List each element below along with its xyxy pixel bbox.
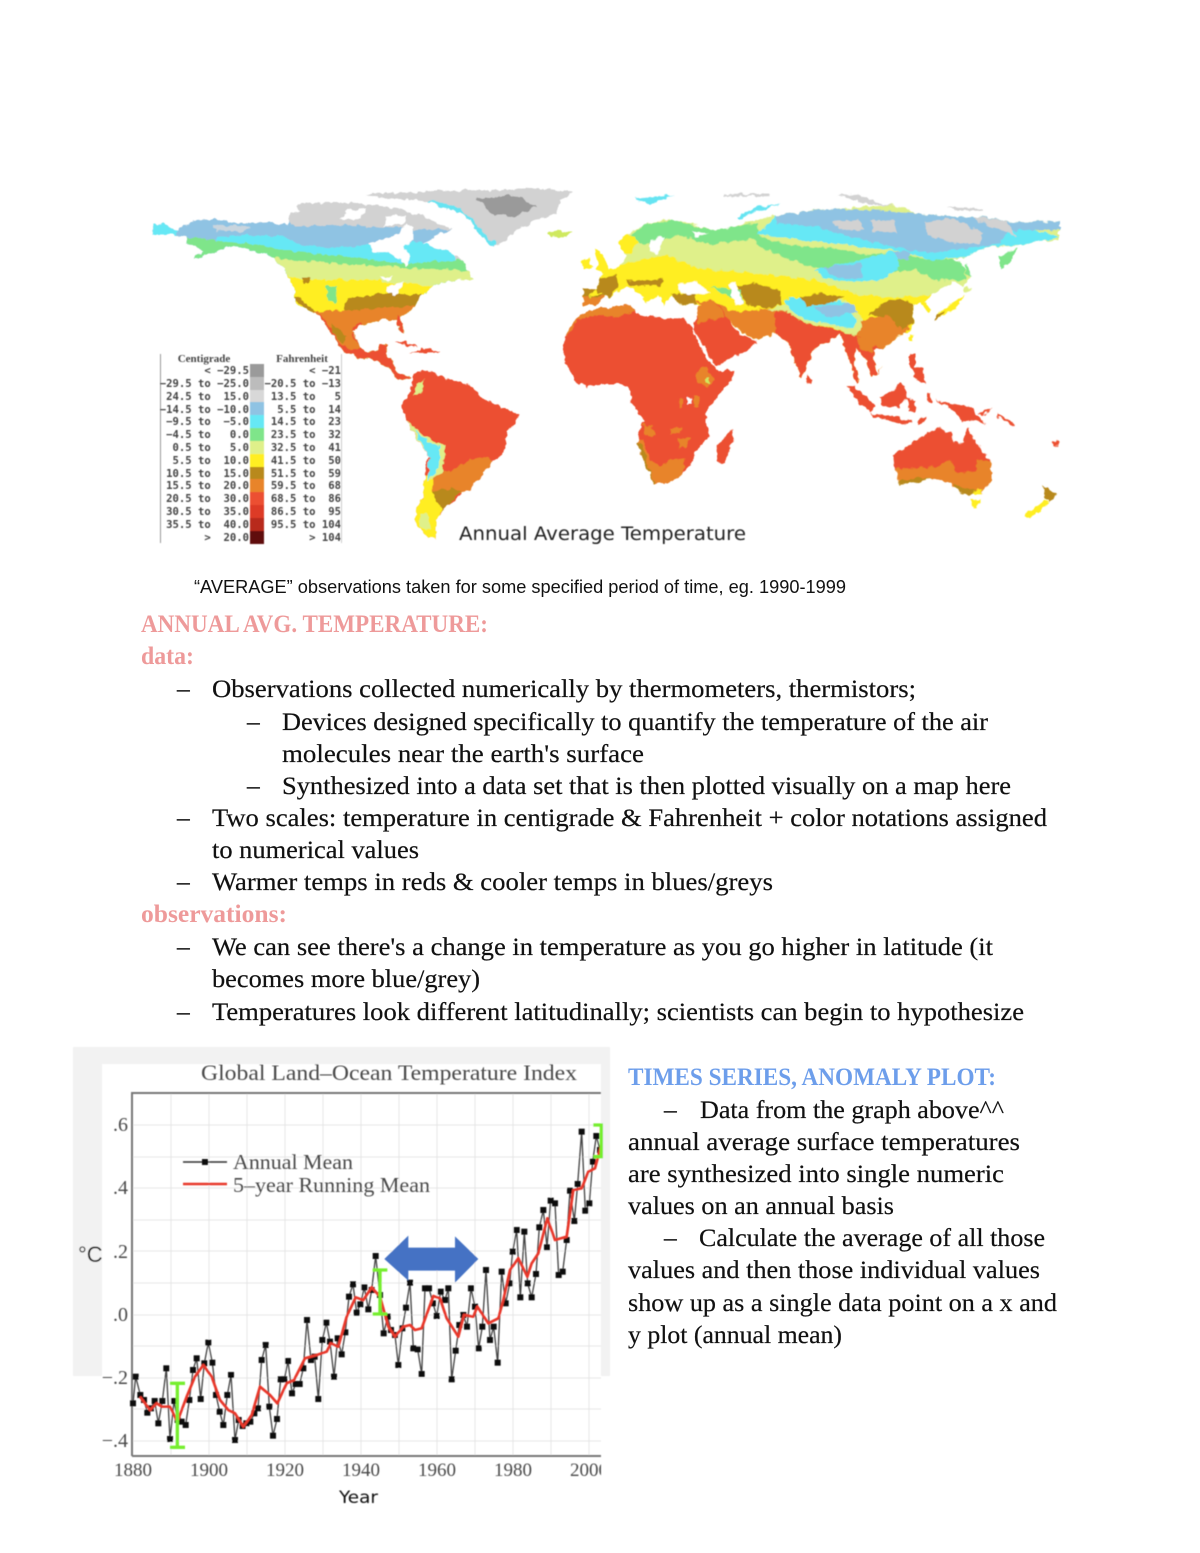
paragraph: calculate the average: y plot (annual mean) <box>628 1320 842 1349</box>
Caribbean islands <box>393 342 440 352</box>
legend centigrade labels: < −29.5 <box>204 365 249 377</box>
bullet list: data: – <box>176 803 190 832</box>
bullet list: data: – <box>246 771 260 800</box>
legend fahrenheit labels: 41.5 to 50 <box>271 455 341 467</box>
section: annual average temperature notes <box>141 609 1047 1026</box>
y axis labels: .6 <box>113 1114 128 1136</box>
legend centigrade labels: 15.5 to 20.0 <box>166 480 249 492</box>
legend centigrade labels: 24.5 to 15.0 <box>166 391 249 403</box>
bullet list: data: to numerical values <box>212 835 419 864</box>
Tasmania <box>971 499 981 508</box>
chart panel: Global Land-Ocean Temperature Index <box>73 1047 610 1508</box>
bullet list: observations: We can see there's a change in temperature as you go higher in latitude (it <box>212 932 993 961</box>
Hudson Bay and lakes <box>317 208 413 337</box>
x axis labels: 1920 <box>266 1460 304 1481</box>
panel background <box>73 1047 610 1376</box>
legend colour bar <box>250 364 264 544</box>
legend fahrenheit labels: 5.5 to 14 <box>277 404 341 416</box>
bullet list: observations <box>176 932 1024 1026</box>
bullet list: data: molecules near the earth's surface <box>282 739 644 768</box>
map caption: “AVERAGE” observations taken for some specified period of time, eg. 1990-1999 <box>194 576 846 597</box>
y axis labels <box>102 1114 128 1452</box>
legend fahrenheit labels: 51.5 to 59 <box>271 468 341 480</box>
paragraph: data from the graph: values on an annual basis <box>628 1191 894 1220</box>
legend fahrenheit labels <box>264 365 341 544</box>
x axis labels: 1900 <box>190 1460 228 1481</box>
y axis labels: −.4 <box>102 1430 128 1452</box>
map legend: temperature scale <box>160 353 342 544</box>
five-year running mean line <box>140 1143 602 1427</box>
Southeast Asian islands and New Guinea <box>847 353 1059 445</box>
legend fahrenheit labels: 68.5 to 86 <box>271 493 341 505</box>
subheading: data: data: <box>141 641 194 670</box>
blue double arrow <box>384 1236 478 1283</box>
legend fahrenheit labels: −20.5 to −13 <box>264 378 341 390</box>
Australia <box>892 426 994 496</box>
y axis labels: −.2 <box>102 1367 128 1389</box>
x axis labels <box>115 1462 602 1477</box>
Eurasia <box>588 202 1062 384</box>
annual mean line <box>133 1132 600 1440</box>
bullet list: data: Devices designed specifically to quantify the temperature of the air <box>282 707 989 736</box>
legend centigrade labels: −4.5 to 0.0 <box>166 429 249 441</box>
section: time series anomaly plot notes <box>628 1062 1057 1349</box>
legend fahrenheit labels: > 104 <box>309 532 341 544</box>
x axis labels: 1880 <box>114 1460 152 1481</box>
paragraph: data from the graph: – <box>663 1095 677 1124</box>
chart axes <box>132 1093 601 1456</box>
x axis labels: 1940 <box>342 1460 380 1481</box>
paragraph: calculate the average: values and then those individual values <box>628 1255 1040 1284</box>
subheading: observations: observations: <box>141 899 287 928</box>
bullet list: data: – <box>246 707 260 736</box>
paragraph: calculate the average: Calculate the average of all those <box>699 1223 1045 1252</box>
green range bracket: 1940s <box>373 1270 387 1314</box>
bullet list: data <box>176 674 1047 896</box>
legend centigrade labels: 20.5 to 30.0 <box>166 493 249 505</box>
Arctic islands <box>633 193 983 220</box>
Newfoundland <box>455 270 473 281</box>
y axis labels: .0 <box>113 1304 128 1326</box>
bullet list: data: – <box>176 867 190 896</box>
heading: annual avg temperature: ANNUAL AVG. TEMPERATURE: <box>141 609 488 638</box>
paragraph: calculate the average <box>628 1223 1057 1349</box>
South America <box>400 369 520 540</box>
bullet list: data: Warmer temps in reds & cooler temps in blues/greys <box>212 867 773 896</box>
bullet list: data: Synthesized into a data set that is then plotted visually on a map here <box>282 771 1011 800</box>
paragraph: data from the graph: Data from the graph above^^ <box>700 1095 1004 1124</box>
legend heading: Fahrenheit: Fahrenheit <box>276 353 328 365</box>
y axis labels: .4 <box>113 1177 128 1199</box>
legend heading: Centigrade: Centigrade <box>178 353 230 365</box>
Greenland <box>367 188 573 247</box>
bullet list: observations: – <box>176 932 190 961</box>
green range bracket: 1890s <box>170 1383 185 1447</box>
chart legend <box>183 1150 431 1197</box>
y axis labels: .2 <box>113 1241 128 1263</box>
legend centigrade labels: 35.5 to 40.0 <box>166 519 249 531</box>
legend centigrade labels: 10.5 to 15.0 <box>166 468 249 480</box>
Iceland <box>547 231 573 237</box>
legend centigrade labels: 0.5 to 5.0 <box>172 442 249 454</box>
map: Americas and Greenland <box>140 180 610 543</box>
y axis unit: °C <box>78 1242 103 1267</box>
x axis title: Year <box>338 1488 378 1508</box>
legend fahrenheit labels: 86.5 to 95 <box>271 506 341 518</box>
New Zealand <box>1025 486 1057 518</box>
bullet list: observations: Temperatures look different latitudinally; scientists can begin to hypothesize <box>212 997 1024 1026</box>
legend centigrade labels: 30.5 to 35.0 <box>166 506 249 518</box>
heading: times series: TIMES SERIES, ANOMALY PLOT: <box>628 1062 996 1091</box>
green range bracket: 2000s <box>593 1125 601 1157</box>
legend centigrade labels: −14.5 to −10.0 <box>160 404 249 416</box>
world temperature map <box>140 180 1067 545</box>
legend centigrade labels: > 20.0 <box>204 532 249 544</box>
legend centigrade labels <box>160 365 249 544</box>
map: Africa, Eurasia, Oceania <box>560 193 1067 518</box>
legend fahrenheit labels: 59.5 to 68 <box>271 480 341 492</box>
x axis labels: 1980 <box>494 1460 532 1481</box>
paragraph: calculate the average: show up as a single data point on a x and <box>628 1288 1057 1317</box>
Iberia <box>583 288 605 305</box>
Black Sea and Caspian <box>650 232 743 305</box>
Arabia <box>693 300 757 366</box>
legend centigrade labels: 5.5 to 10.0 <box>172 455 249 467</box>
legend fahrenheit labels: 13.5 to 5 <box>271 391 341 403</box>
legend fahrenheit labels: < −21 <box>309 365 341 377</box>
Japan and northeast islands <box>935 248 1017 321</box>
legend fahrenheit labels: 23.5 to 32 <box>271 429 341 441</box>
Madagascar <box>717 429 733 463</box>
map landmasses <box>140 180 1067 543</box>
North America <box>152 202 474 381</box>
bullet list: observations: – <box>176 997 190 1026</box>
chart title: Global Land–Ocean Temperature Index <box>201 1060 577 1085</box>
paragraph: data from the graph <box>628 1095 1020 1220</box>
Africa <box>560 300 740 490</box>
legend fahrenheit labels: 95.5 to 104 <box>271 519 341 531</box>
Sri Lanka and Taiwan <box>806 335 913 384</box>
legend centigrade labels: −9.5 to −5.0 <box>166 416 249 428</box>
bullet list: data: Observations collected numerically by thermometers, thermistors; <box>212 674 916 703</box>
paragraph: calculate the average: – <box>663 1223 677 1252</box>
paragraph: data from the graph: annual average surface temperatures <box>628 1127 1020 1156</box>
chart legend: Annual Mean <box>233 1150 354 1174</box>
x axis labels: 2000 <box>570 1460 608 1481</box>
map title: Annual Average Temperature <box>459 523 746 545</box>
chart legend: 5–year Running Mean <box>233 1173 431 1197</box>
UK and Ireland <box>581 250 610 277</box>
paragraph: data from the graph: are synthesized into single numeric <box>628 1159 1004 1188</box>
x axis labels: 1960 <box>418 1460 456 1481</box>
legend centigrade labels: −29.5 to −25.0 <box>160 378 249 390</box>
bullet list: data: – <box>176 674 190 703</box>
legend fahrenheit labels: 32.5 to 41 <box>271 442 341 454</box>
bullet list: observations: becomes more blue/grey) <box>212 964 480 993</box>
bullet list: data: Two scales: temperature in centigrade & Fahrenheit + color notations assigned <box>212 803 1047 832</box>
legend fahrenheit labels: 14.5 to 23 <box>271 416 341 428</box>
